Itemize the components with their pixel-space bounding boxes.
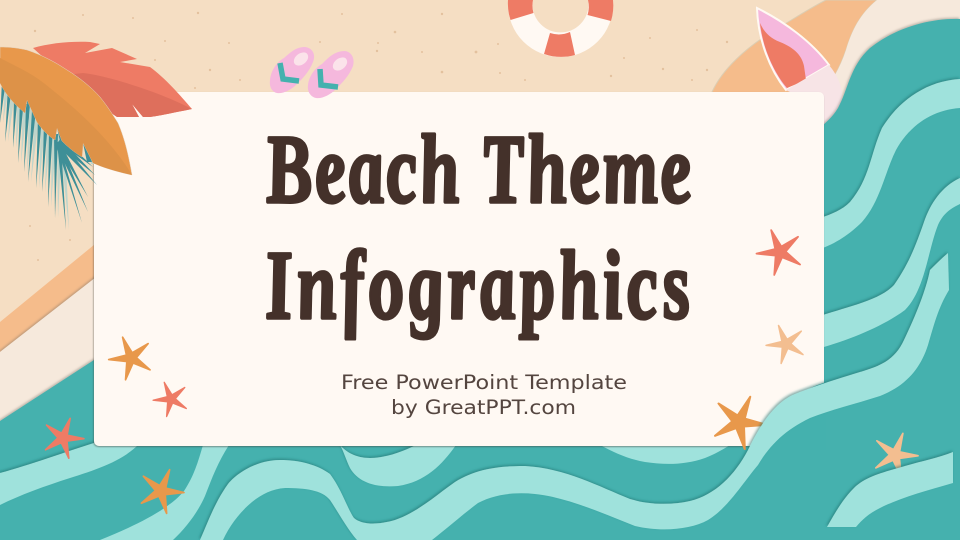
wave stripe under card centre (340, 445, 456, 486)
icon: palm frond (0, 80, 97, 230)
icon: life ring (508, 0, 613, 57)
band: peach wet sand right (712, 0, 877, 96)
icon: coral leaf (33, 42, 192, 117)
wave stripe under card right (600, 445, 730, 464)
title (258, 115, 697, 340)
subtitle: Free PowerPoint Template (341, 371, 627, 394)
wave stripe bottom right (827, 452, 953, 527)
band: peach wet sand left (0, 240, 100, 352)
surfboard (757, 8, 842, 124)
title: Infographics (258, 231, 695, 340)
wave stripe lower left (100, 445, 229, 540)
band: pale shore left (0, 274, 100, 422)
sea over card corner (748, 382, 826, 450)
wave stripe 1 (820, 79, 960, 249)
sand speckles (29, 12, 728, 261)
star: peach on sea right (868, 426, 923, 480)
icon: flip flop right (308, 51, 354, 98)
star: orange card left (103, 329, 158, 383)
icon: flip flop left (270, 47, 314, 93)
subtitle: by GreatPPT.com (391, 396, 576, 419)
icon: orange leaf (0, 47, 132, 175)
panel: title card (94, 92, 824, 446)
title: Beach Theme (258, 115, 697, 224)
star: peach card right (761, 318, 810, 366)
wave stripe main (200, 253, 949, 540)
star: coral card left (148, 376, 192, 419)
subtitle (341, 371, 627, 419)
star: orange card corner (706, 386, 774, 453)
star: coral on sea left (38, 411, 89, 461)
band: pale shore right (820, 0, 960, 130)
star: orange on sea (134, 461, 190, 516)
wave stripe 2 (820, 178, 960, 348)
wave stripe left (0, 441, 137, 505)
star: coral card right (750, 222, 808, 278)
